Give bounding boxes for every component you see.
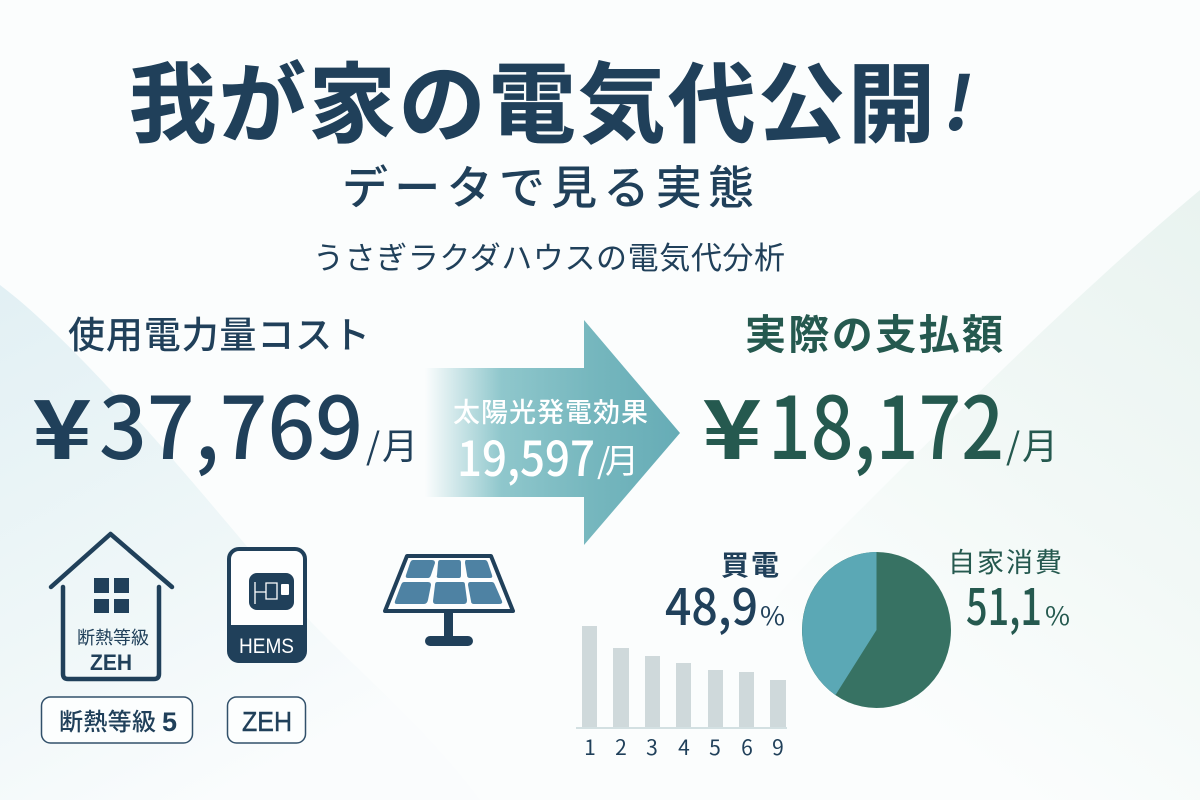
usage cost amount: 37,769 xyxy=(99,359,363,484)
usage cost amount: ¥ xyxy=(32,364,92,483)
actual payment amount: ¥ xyxy=(702,364,762,483)
bar chart: 3 xyxy=(646,732,658,762)
label: grid purchase: 買電 xyxy=(721,544,779,584)
actual payment amount: /月 xyxy=(1006,418,1058,470)
heading: usage cost: 使用電力量コスト xyxy=(68,305,370,359)
usage cost amount: /月 xyxy=(366,418,418,470)
bar chart: 9 xyxy=(772,732,784,762)
label: grid purchase xyxy=(665,544,785,640)
arrow: solar effect: 太陽光発電効果 xyxy=(453,391,648,430)
label: self consumption: 51,1 xyxy=(966,568,1042,640)
bar chart xyxy=(576,626,787,762)
title: 我が家の電気代公開 xyxy=(129,35,935,161)
actual payment amount: 18,172 xyxy=(768,359,1004,484)
tagline: うさぎラクダハウスの電気代分析 xyxy=(313,233,785,278)
bar chart: 2 xyxy=(615,732,627,762)
arrow: solar effect: 19,597 xyxy=(457,420,595,490)
label: self consumption: % xyxy=(1045,597,1070,633)
icon: HEMS: HEMS xyxy=(239,635,294,658)
badge: insulation grade 5 xyxy=(42,697,192,743)
heading: actual payment: 実際の支払額 xyxy=(745,301,1003,361)
badge: ZEH xyxy=(228,697,306,743)
label: self consumption xyxy=(948,541,1070,640)
arrow: solar effect xyxy=(425,320,680,545)
icon: solar panel xyxy=(385,556,513,646)
bar chart: 1 xyxy=(584,732,596,762)
subtitle: データで見る実態 xyxy=(342,152,754,218)
badge: insulation grade 5: 断熱等級 xyxy=(59,702,156,737)
arrow: solar effect: /月 xyxy=(597,434,639,483)
title: ! xyxy=(937,45,983,152)
bar chart: 6 xyxy=(741,732,753,762)
icon: house ZEH: 断熱等級 xyxy=(77,624,149,650)
pie chart xyxy=(802,552,951,708)
badge: ZEH: ZEH xyxy=(242,706,292,737)
label: grid purchase: % xyxy=(760,597,785,633)
bar chart: 5 xyxy=(709,732,721,762)
icon: house ZEH xyxy=(51,534,172,679)
label: grid purchase: 48,9 xyxy=(665,568,758,640)
bar chart: 4 xyxy=(678,732,690,762)
icon: HEMS xyxy=(228,549,306,663)
icon: house ZEH: ZEH xyxy=(90,650,132,675)
badge: insulation grade 5: 5 xyxy=(162,707,177,737)
label: self consumption: 自家消費 xyxy=(948,541,1062,580)
